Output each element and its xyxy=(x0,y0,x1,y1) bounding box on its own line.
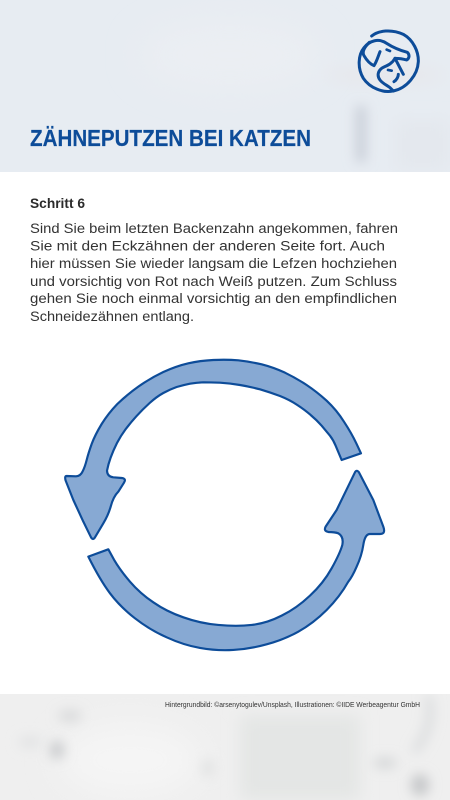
logo dog head xyxy=(359,40,409,91)
logo ring and dog outline xyxy=(372,31,418,91)
logo: dog and cat in circle xyxy=(359,31,418,91)
logo dog ear xyxy=(363,42,380,66)
logo cat xyxy=(378,58,403,91)
title: ZÄHNEPUTZEN BEI KATZEN xyxy=(30,125,311,151)
circular arrows xyxy=(65,360,384,650)
body text xyxy=(30,221,398,325)
body text: gehen Sie noch einmal vorsichtig an den empfindlichen xyxy=(30,291,397,307)
body text: und vorsichtig von Rot nach Weiß putzen. Zum Schluss xyxy=(30,274,397,290)
footer background xyxy=(0,694,450,800)
body text: hier müssen Sie wieder langsam die Lefzen hochziehen xyxy=(30,256,397,272)
header background xyxy=(0,0,450,172)
image credit: Hintergrundbild: ©arsenytogulev/Unsplash, Illustrationen: ©IIDE Werbeagentur GmbH xyxy=(165,701,420,709)
logo dog eye xyxy=(387,50,390,51)
logo cat eye xyxy=(388,66,392,75)
arrow: bottom, pointing up right xyxy=(88,471,384,650)
body text: Sind Sie beim letzten Backenzahn angekommen, fahren xyxy=(30,221,398,237)
body text: Sie mit den Eckzähnen der anderen Seite fort. Auch xyxy=(30,238,385,254)
step heading: Schritt 6 xyxy=(30,195,85,211)
arrow: top, pointing down left xyxy=(65,360,361,539)
body text: Schneidezähnen entlang. xyxy=(30,309,194,325)
